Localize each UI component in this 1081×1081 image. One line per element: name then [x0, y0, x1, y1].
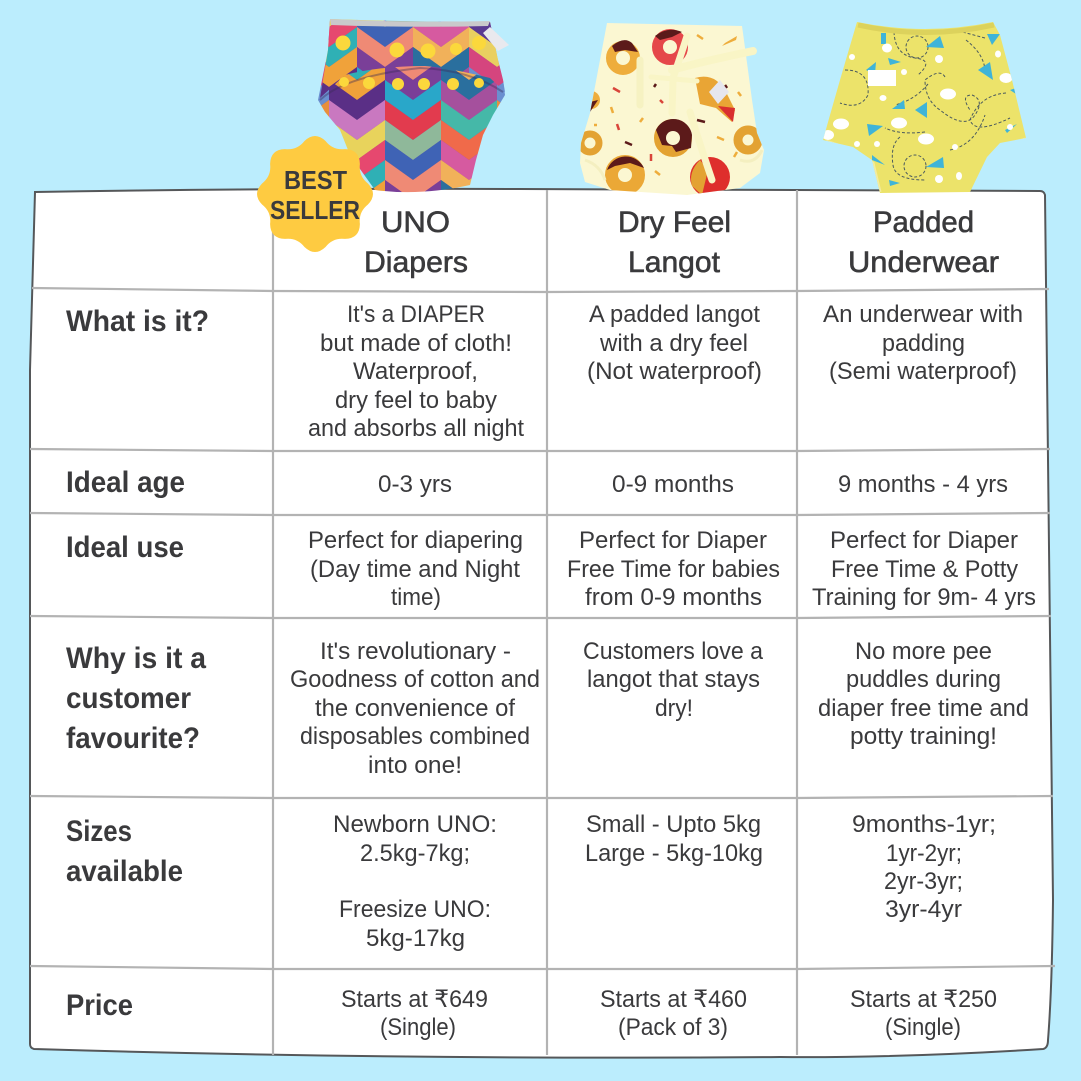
cell: UNO favourite: It's revolutionary - [320, 638, 511, 665]
product image: Padded Underwear [823, 22, 1026, 193]
column heading: Dry Feel Langot: Dry Feel [618, 206, 731, 239]
cell: UNO sizes: Newborn UNO: [333, 811, 497, 838]
table frame [30, 189, 1053, 1058]
cell: Underwear what is it: padding [882, 330, 965, 357]
cell: Underwear what is it: An underwear with [823, 301, 1023, 328]
cell: Underwear sizes: 1yr-2yr; [886, 840, 962, 867]
cell: Langot price: (Pack of 3) [618, 1014, 728, 1041]
cell: Langot sizes: Small - Upto 5kg [586, 811, 761, 838]
cell: Underwear favourite [818, 638, 1029, 750]
cell: UNO favourite: the convenience of [315, 695, 515, 722]
grid lines [30, 190, 1055, 1055]
cell: Underwear favourite: potty training! [850, 723, 997, 750]
cell: UNO ideal age: 0-3 yrs [378, 471, 452, 498]
column heading: Padded Underwear: Underwear [848, 246, 999, 279]
column heading: UNO Diapers: Diapers [364, 246, 468, 279]
cell: UNO ideal use: Perfect for diapering [308, 527, 523, 554]
cell: UNO favourite: into one! [368, 752, 462, 779]
badge: best seller: BEST [284, 165, 347, 195]
cell: Langot favourite: Customers love a [583, 638, 764, 665]
cell: UNO ideal use: time) [391, 584, 441, 611]
cell: Langot favourite: dry! [655, 695, 693, 722]
cell: Underwear sizes: 2yr-3yr; [884, 868, 963, 895]
cell: UNO ideal use: (Day time and Night [310, 556, 520, 583]
cell: Underwear sizes: 3yr-4yr [885, 896, 962, 923]
cell: Underwear ideal use: Free Time & Potty [831, 556, 1018, 583]
ties [640, 36, 753, 180]
column heading: Padded Underwear [848, 206, 999, 279]
row label: Sizes available: available [66, 855, 183, 888]
cell: Langot ideal use: Free Time for babies [567, 556, 780, 583]
cell: UNO price: Starts at ₹649 [341, 986, 488, 1013]
cell: Underwear sizes: 9months-1yr; [852, 811, 996, 838]
row label: What is it?: What is it? [66, 305, 209, 338]
badge: best seller: SELLER [270, 195, 360, 225]
cell: UNO what is it: but made of cloth! [320, 330, 512, 357]
cell: Underwear price: Starts at ₹250 [850, 986, 997, 1013]
cell: Underwear ideal use: Training for 9m- 4 yrs [812, 584, 1036, 611]
cell: Langot price [600, 986, 747, 1041]
column heading: UNO Diapers [364, 206, 468, 279]
cell: Underwear ideal age: 9 months - 4 yrs [838, 471, 1008, 498]
cell: UNO ideal use [308, 527, 523, 611]
cell: Underwear price [850, 986, 997, 1041]
cell: UNO price [341, 986, 488, 1041]
cell: Langot price: Starts at ₹460 [600, 986, 747, 1013]
cell: Langot ideal use [567, 527, 780, 611]
cell: Underwear ideal use [812, 527, 1036, 611]
row label: Ideal age: Ideal age [66, 466, 185, 499]
cell: UNO what is it: Waterproof, [353, 358, 478, 385]
cell: Langot sizes: Large - 5kg-10kg [585, 840, 763, 867]
cell: Underwear price: (Single) [885, 1014, 961, 1041]
cell: UNO what is it: dry feel to baby [335, 387, 497, 414]
cell: UNO sizes [333, 811, 497, 952]
column heading: Dry Feel Langot [618, 206, 731, 279]
cell: Langot ideal age: 0-9 months [612, 471, 734, 498]
cell: Langot favourite: langot that stays [587, 666, 760, 693]
product image: Dry Feel Langot [580, 23, 764, 195]
column heading: Dry Feel Langot: Langot [628, 246, 721, 279]
cell: Langot what is it: with a dry feel [599, 330, 748, 357]
row label: Sizes available: Sizes [66, 815, 132, 848]
cell: Underwear favourite: No more pee [855, 638, 992, 665]
cell: UNO sizes: 2.5kg-7kg; [360, 840, 470, 867]
column heading: Padded Underwear: Padded [873, 206, 974, 239]
panel: comparison table [30, 189, 1055, 1058]
cell: Langot ideal use: Perfect for Diaper [579, 527, 767, 554]
cell: UNO what is it [308, 301, 524, 442]
cell: Langot what is it: A padded langot [589, 301, 760, 328]
cell: UNO favourite [290, 638, 540, 779]
cell: Underwear sizes [852, 811, 996, 923]
cell: Langot sizes [585, 811, 763, 867]
cell: UNO favourite: Goodness of cotton and [290, 666, 540, 693]
cell: UNO what is it: and absorbs all night [308, 415, 524, 442]
cell: Langot ideal use: from 0-9 months [585, 584, 762, 611]
cell: Underwear favourite: diaper free time and [818, 695, 1029, 722]
row label: Price: Price [66, 989, 133, 1022]
cell: Langot favourite [583, 638, 764, 722]
cell: Underwear what is it [823, 301, 1023, 385]
cell: Underwear what is it: (Semi waterproof) [829, 358, 1017, 385]
cell: UNO price: (Single) [380, 1014, 456, 1041]
row label: Sizes available [66, 815, 183, 888]
column heading: UNO Diapers: UNO [381, 206, 450, 239]
cell: Langot what is it: (Not waterproof) [587, 358, 762, 385]
row label: Why is it a customer favourite?: favourite? [66, 722, 200, 755]
cell: Underwear ideal use: Perfect for Diaper [830, 527, 1018, 554]
cell: UNO what is it: It's a DIAPER [347, 301, 485, 328]
row label: Why is it a customer favourite?: Why is it a [66, 642, 206, 675]
cell: Langot what is it [587, 301, 762, 385]
cell: UNO sizes: Freesize UNO: [339, 896, 491, 923]
cell: UNO sizes: 5kg-17kg [366, 925, 465, 952]
cell: UNO favourite: disposables combined [300, 723, 530, 750]
badge: best seller [257, 136, 373, 252]
row label: Ideal use: Ideal use [66, 531, 184, 564]
cell: Underwear favourite: puddles during [846, 666, 1001, 693]
row label: Why is it a customer favourite?: customer [66, 682, 191, 715]
product image: UNO diaper [318, 19, 509, 192]
row label: Why is it a customer favourite? [66, 642, 206, 755]
